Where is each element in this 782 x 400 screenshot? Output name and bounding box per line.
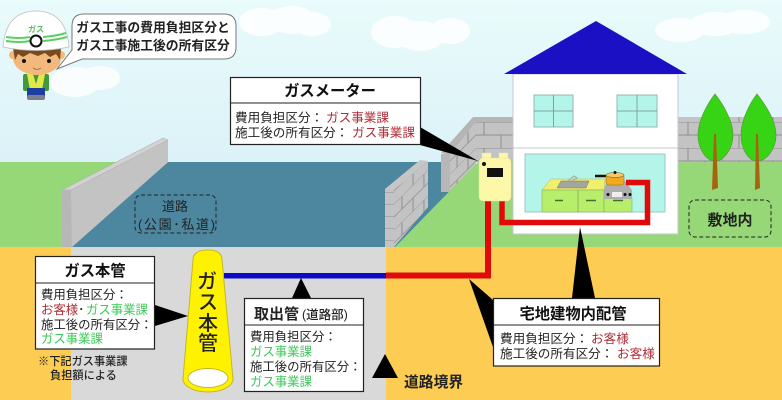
gas main pipe: 本 xyxy=(198,312,218,335)
panel: gas meter xyxy=(230,78,420,144)
site label: 敷地内 xyxy=(707,211,753,229)
pointer: house pipe left xyxy=(469,279,493,347)
note: ※下記ガス事業課 xyxy=(38,354,128,368)
red service pipe xyxy=(386,198,488,276)
note xyxy=(38,354,128,382)
house xyxy=(504,21,687,234)
road label xyxy=(135,195,216,233)
road boundary label: 道路境界 xyxy=(404,373,463,391)
character: worker xyxy=(3,11,69,100)
pointer: gas main xyxy=(155,305,188,326)
underground: road section xyxy=(71,247,386,400)
panel: residential pipe: お客様 xyxy=(591,332,629,346)
back wall: behind house, left xyxy=(441,117,514,192)
panel: service pipe: 費用負担区分： xyxy=(250,329,337,344)
pointer: meter xyxy=(420,127,478,161)
road label: 道路 xyxy=(162,199,188,214)
gas meter xyxy=(479,153,511,201)
panel: gas main info: ガス本管 xyxy=(64,262,126,280)
red house pipe xyxy=(502,182,648,222)
panel: service pipe: (道路部) xyxy=(302,307,348,322)
road surface xyxy=(72,162,450,247)
underground: orange left and right xyxy=(0,247,782,400)
note: 負担額による xyxy=(50,368,117,382)
panel: gas meter: ガスメーター xyxy=(284,83,376,100)
pointer: road boundary xyxy=(372,354,398,378)
panel: service pipe: ガス事業課 xyxy=(250,374,313,389)
window right xyxy=(617,95,657,127)
panel: gas meter: 費用負担区分： xyxy=(235,111,323,125)
left road wall xyxy=(62,138,168,247)
speech bubble xyxy=(57,14,236,69)
ground: lawn left xyxy=(0,162,130,247)
site label xyxy=(689,200,771,237)
gas main pipe: ガ xyxy=(197,270,217,293)
speech bubble: ガス工事施工後の所有区分 xyxy=(76,38,230,53)
panel: gas meter: ガス事業課 xyxy=(352,125,415,140)
kitchen room xyxy=(525,154,665,212)
panel: gas meter: ガス事業課 xyxy=(326,110,389,125)
panel: service pipe: ガス事業課 xyxy=(250,344,313,359)
panel: gas main info xyxy=(35,256,155,349)
panel: residential pipe: 宅地建物内配管 xyxy=(519,305,627,323)
panel: gas main info: お客様･ xyxy=(41,303,84,317)
kitchen counter xyxy=(542,176,632,212)
blue pipe xyxy=(224,273,386,278)
roof xyxy=(504,21,687,74)
panel: gas meter: 施工後の所有区分： xyxy=(235,126,348,140)
road label: (公園･私道) xyxy=(138,217,215,232)
panel: service pipe xyxy=(244,298,364,392)
tree right xyxy=(741,94,776,190)
pointer: house pipe up xyxy=(572,227,595,298)
pointer: service pipe xyxy=(292,278,311,298)
panel: service pipe: 取出管 xyxy=(254,306,299,323)
lawn: private land xyxy=(395,160,782,247)
panel: gas main info: 施工後の所有区分： xyxy=(41,318,153,332)
right road wall xyxy=(385,160,428,247)
panel: residential pipe: 費用負担区分： xyxy=(500,332,588,346)
sky xyxy=(0,0,782,163)
trees xyxy=(698,94,776,190)
window left xyxy=(534,95,573,127)
panel: residential pipe: 施工後の所有区分： xyxy=(500,347,613,361)
back wall: right of house xyxy=(678,117,782,163)
gas main pipe xyxy=(183,250,233,392)
character: worker: ガス xyxy=(28,24,44,34)
panel: service pipe: 施工後の所有区分： xyxy=(250,360,362,374)
clouds xyxy=(50,6,770,97)
panel: gas main info: ガス事業課 xyxy=(86,302,149,317)
speech bubble: ガス工事の費用負担区分と xyxy=(76,20,230,35)
tree left xyxy=(698,94,733,190)
gas main pipe: ス xyxy=(198,292,218,314)
panel: residential pipe: お客様 xyxy=(617,347,655,361)
panel: gas main info: 費用負担区分： xyxy=(41,287,128,302)
panel: gas main info: ガス事業課 xyxy=(41,331,104,346)
gas main pipe: 管 xyxy=(198,332,218,355)
panel: residential pipe xyxy=(493,298,660,366)
gas stove and pot xyxy=(595,171,632,199)
